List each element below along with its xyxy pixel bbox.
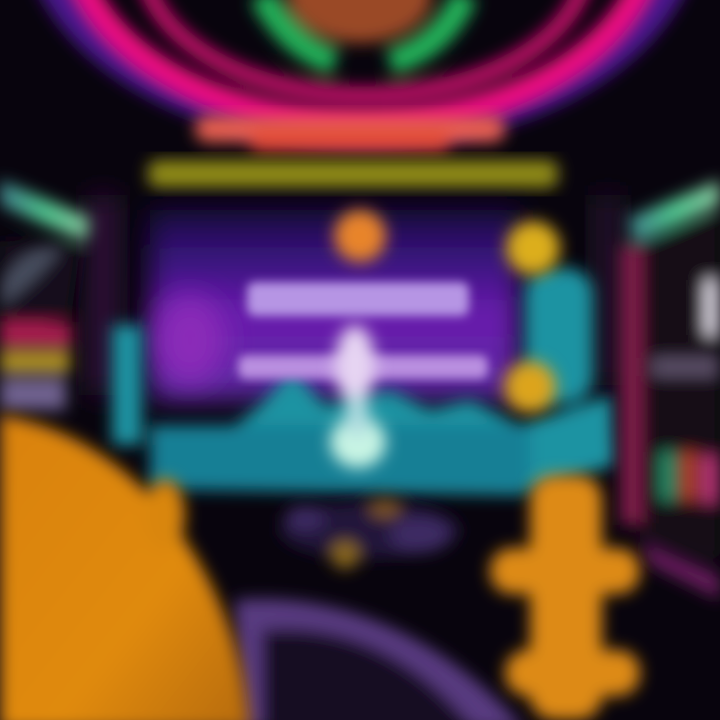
orange puzzle figure (490, 475, 640, 720)
white headline band lower (238, 355, 488, 379)
screen frame (88, 195, 118, 395)
ceiling neon rings (37, 0, 687, 132)
white headline band upper (247, 282, 469, 316)
large orange foreground shape (0, 415, 250, 720)
orange coin top (334, 210, 386, 262)
screen right frame (595, 195, 621, 385)
salmon heading band (195, 116, 505, 152)
rocket (330, 325, 386, 468)
right arcade cabinet (620, 180, 720, 600)
yellow coin upper right (506, 221, 560, 275)
teal skyline (112, 268, 615, 495)
central screen (88, 195, 621, 495)
left arcade cabinet (0, 180, 90, 410)
yellow subheading band (148, 160, 558, 188)
yellow coin lower right (504, 361, 556, 413)
purple bottom arc (235, 599, 525, 720)
purple screen sky (150, 210, 520, 400)
console below screen (280, 498, 460, 569)
left purple glow (154, 295, 226, 385)
